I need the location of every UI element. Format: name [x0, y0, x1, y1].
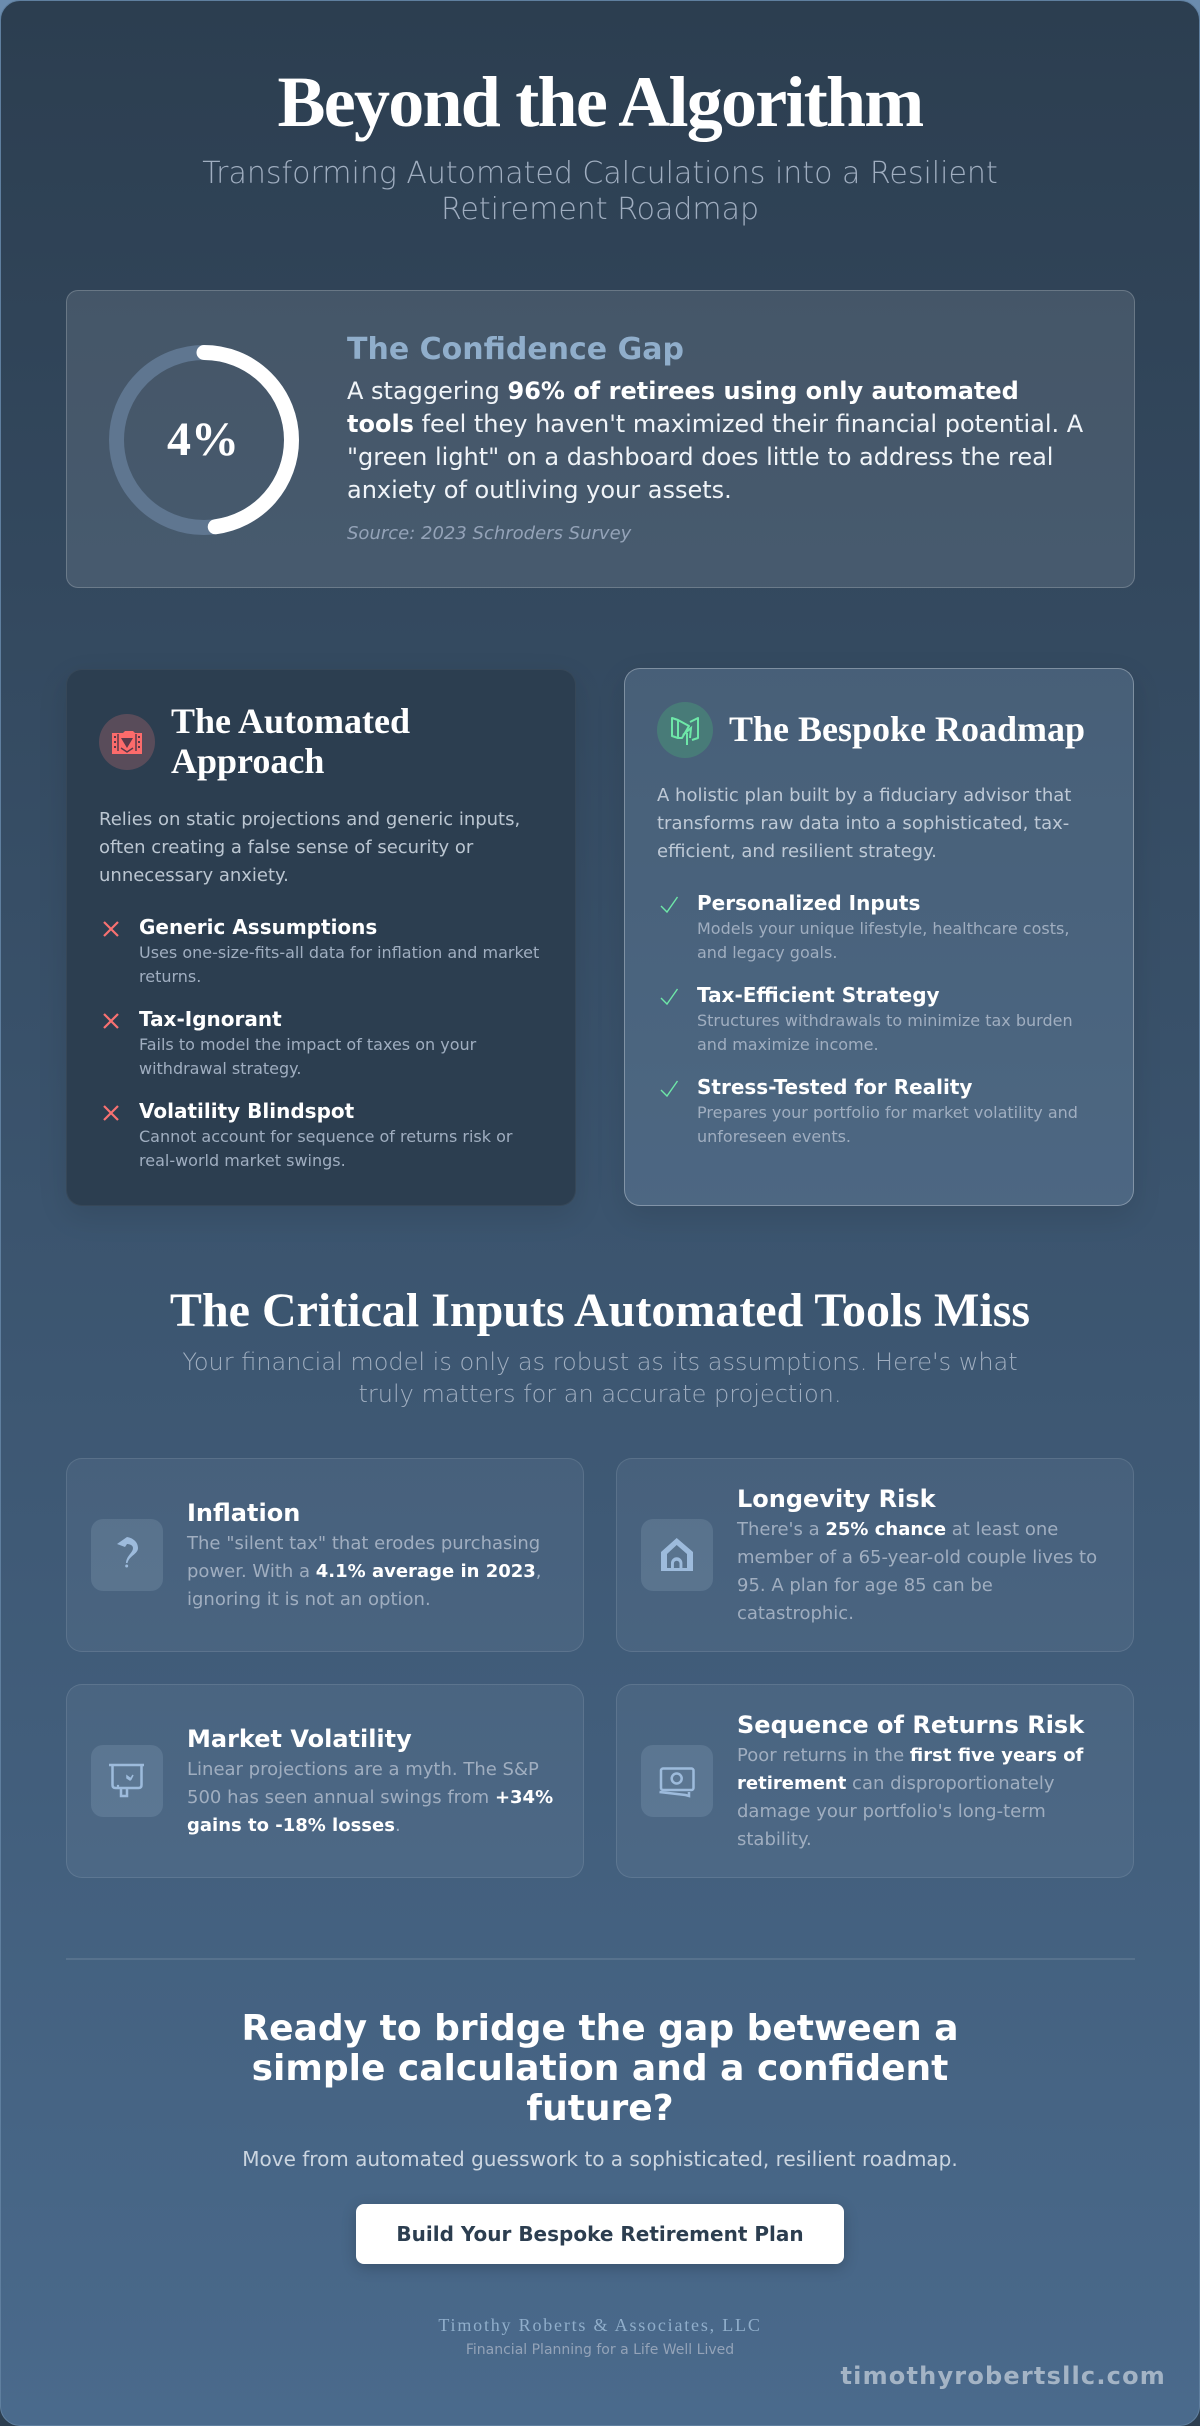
- body text: tools feel they haven't maximized their financial potential. A: [347, 410, 1083, 438]
- panel: the confidence gap: [66, 290, 1135, 588]
- watermark url: timothyrobertsllc.com: [840, 2362, 1166, 2390]
- list item: tax-ignorant: withdrawal strategy.: [139, 1059, 301, 1078]
- text: retirement can disproportionately: [737, 1773, 1054, 1794]
- list item: tax-ignorant: Fails to model the impact of taxes on your: [139, 1035, 476, 1054]
- list item: generic assumptions: Generic Assumptions: [139, 915, 377, 939]
- donut chart: 4%: 4%: [167, 413, 239, 466]
- list item: tax-ignorant: [103, 1007, 476, 1078]
- list item: volatility blindspot: real-world market swings.: [139, 1151, 346, 1170]
- footer firm name: Timothy Roberts & Associates, LLC: [438, 2315, 762, 2335]
- icon: presentation board: [91, 1745, 163, 1817]
- card: longevity risk: [616, 1458, 1134, 1652]
- list item: volatility blindspot: [103, 1099, 512, 1170]
- text: member of a 65-year-old couple lives to: [737, 1547, 1097, 1568]
- icon: bespoke roadmap: [657, 702, 713, 758]
- list item: stress-tested for reality: Prepares your portfolio for market volatility and: [697, 1103, 1078, 1122]
- description: often creating a false sense of security or: [99, 837, 473, 858]
- icon: house: [641, 1519, 713, 1591]
- text: [736, 1519, 1097, 1624]
- list item: stress-tested for reality: unforeseen events.: [697, 1127, 851, 1146]
- text: gains to -18% losses.: [187, 1815, 401, 1836]
- heading: Longevity Risk: [737, 1485, 936, 1513]
- cta heading: Ready to bridge the gap between a: [241, 2008, 959, 2049]
- footer tagline: Financial Planning for a Life Well Lived: [466, 2342, 734, 2358]
- text: 500 has seen annual swings from +34%: [187, 1787, 553, 1808]
- section subheading: truly matters for an accurate projection.: [358, 1380, 842, 1408]
- title: Beyond the Algorithm: [277, 62, 923, 142]
- list item: personalized inputs: Personalized Inputs: [697, 891, 920, 915]
- heading: [171, 701, 410, 781]
- text: catastrophic.: [737, 1603, 854, 1624]
- heading: The Confidence Gap: [347, 332, 684, 367]
- text: [737, 1745, 1084, 1850]
- description: A holistic plan built by a fiduciary advisor that: [657, 785, 1071, 806]
- list item: generic assumptions: Uses one-size-fits-all data for inflation and market: [139, 943, 539, 962]
- icon: automated approach: [99, 714, 155, 770]
- text: Linear projections are a myth. The S&P: [187, 1759, 539, 1780]
- cta heading: future?: [526, 2088, 674, 2129]
- description: Relies on static projections and generic inputs,: [99, 809, 520, 830]
- source: Source: 2023 Schroders Survey: [347, 523, 631, 544]
- cta heading: [241, 2008, 959, 2129]
- list item: generic assumptions: returns.: [139, 967, 201, 986]
- cta button: Build Your Bespoke Retirement Plan: [396, 2222, 804, 2246]
- icon: question mark: [91, 1519, 163, 1591]
- text: power. With a 4.1% average in 2023,: [187, 1561, 542, 1582]
- description: [657, 785, 1071, 862]
- text: [186, 1533, 542, 1610]
- text: damage your portfolio's long-term: [737, 1801, 1046, 1822]
- text: 95. A plan for age 85 can be: [737, 1575, 993, 1596]
- subtitle: Retirement Roadmap: [441, 192, 759, 226]
- text: Poor returns in the first five years of: [737, 1745, 1083, 1766]
- cta subheading: Move from automated guesswork to a sophisticated, resilient roadmap.: [242, 2147, 958, 2171]
- text: There's a 25% chance at least one: [737, 1519, 1058, 1540]
- list item: personalized inputs: and legacy goals.: [697, 943, 837, 962]
- list item: personalized inputs: Models your unique lifestyle, healthcare costs,: [697, 919, 1069, 938]
- list item: stress-tested for reality: [660, 1075, 1078, 1146]
- card: market volatility: [66, 1684, 584, 1878]
- text: [187, 1759, 553, 1836]
- description: [99, 809, 520, 886]
- card: inflation: [66, 1458, 584, 1652]
- body text: [347, 377, 1083, 504]
- body text: "green light" on a dashboard does little to address the real: [347, 443, 1053, 471]
- list item: volatility blindspot: Volatility Blindspot: [139, 1099, 354, 1123]
- heading: Sequence of Returns Risk: [737, 1711, 1084, 1739]
- list item: tax-efficient strategy: Structures withdrawals to minimize tax burden: [697, 1011, 1073, 1030]
- list item: personalized inputs: [660, 891, 1069, 962]
- donut chart: 4%: [109, 345, 299, 535]
- section subheading: [182, 1348, 1018, 1408]
- description: unnecessary anxiety.: [99, 865, 289, 886]
- panel: the bespoke roadmap: [624, 668, 1134, 1206]
- heading: Inflation: [187, 1499, 300, 1527]
- list item: tax-efficient strategy: [660, 983, 1073, 1054]
- subtitle: [202, 156, 998, 226]
- list item: stress-tested for reality: Stress-Tested for Reality: [697, 1075, 972, 1099]
- heading: Approach: [171, 741, 324, 781]
- list item: volatility blindspot: Cannot account for sequence of returns risk or: [139, 1127, 512, 1146]
- subtitle: Transforming Automated Calculations into a Resilient: [202, 156, 998, 190]
- list item: tax-ignorant: Tax-Ignorant: [139, 1007, 282, 1031]
- cta heading: simple calculation and a confident: [252, 2048, 948, 2089]
- panel: the automated approach: [66, 669, 576, 1206]
- body text: A staggering 96% of retirees using only automated: [347, 377, 1019, 405]
- list item: generic assumptions: [103, 915, 539, 986]
- text: stability.: [737, 1829, 812, 1850]
- icon: banknote: [641, 1745, 713, 1817]
- section heading: critical inputs: The Critical Inputs Automated Tools Miss: [170, 1284, 1030, 1337]
- list item: tax-efficient strategy: Tax-Efficient Strategy: [697, 983, 940, 1007]
- list item: tax-efficient strategy: and maximize income.: [697, 1035, 879, 1054]
- section subheading: Your financial model is only as robust as its assumptions. Here's what: [182, 1348, 1018, 1376]
- heading: The Bespoke Roadmap: [729, 709, 1085, 749]
- card: sequence of returns risk: [616, 1684, 1134, 1878]
- heading: Market Volatility: [187, 1725, 412, 1753]
- body text: anxiety of outliving your assets.: [347, 476, 732, 504]
- heading: The Automated: [171, 701, 410, 741]
- cta button: [356, 2204, 844, 2264]
- description: transforms raw data into a sophisticated, tax-: [657, 813, 1069, 834]
- text: ignoring it is not an option.: [187, 1589, 431, 1610]
- description: efficient, and resilient strategy.: [657, 841, 937, 862]
- text: The "silent tax" that erodes purchasing: [187, 1533, 540, 1554]
